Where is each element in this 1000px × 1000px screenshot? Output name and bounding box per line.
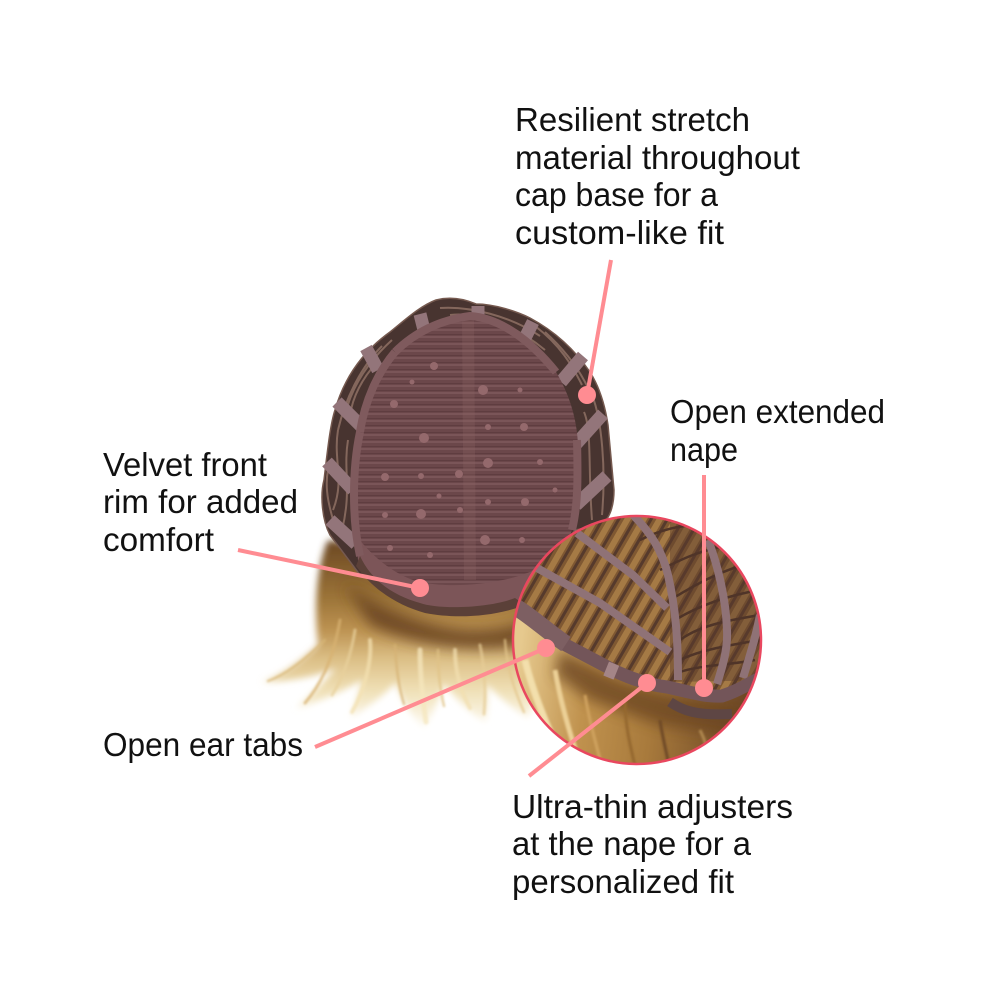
inset hair (514, 618, 748, 763)
label: open ear tabs: Open ear tabs (103, 726, 303, 763)
label: velvet front rim (103, 446, 298, 558)
callout line: velvet rim (238, 550, 429, 597)
mesh dots (381, 362, 558, 558)
cap side panels (322, 298, 614, 590)
label: open extended nape: nape (670, 431, 738, 468)
inset slider (603, 662, 619, 680)
label: resilient stretch material: material throughout (515, 139, 800, 176)
wig cap (322, 298, 614, 616)
label: velvet front rim: comfort (103, 521, 214, 558)
label: resilient stretch material (515, 101, 800, 251)
elastic straps (327, 306, 607, 544)
label: resilient stretch material: custom-like fit (515, 214, 724, 251)
cap side strands (327, 308, 604, 530)
label: open extended nape (670, 393, 885, 468)
label: velvet front rim: rim for added (103, 483, 298, 520)
inset ear tab (514, 606, 566, 644)
label: resilient stretch material: cap base for a (515, 176, 719, 213)
inset cross wefts (640, 525, 760, 672)
callout line: ear tabs (315, 639, 555, 747)
dark hair root shadow (345, 585, 545, 648)
inset open wefting (522, 517, 760, 690)
wig hair (262, 540, 570, 728)
infographic canvas (103, 107, 883, 900)
side rim strips (354, 316, 577, 556)
label: velvet front rim: Velvet front (103, 446, 267, 483)
callout line: adjusters (529, 674, 656, 776)
mesh crown (353, 315, 578, 608)
label: ultra-thin adjusters: at the nape for a (512, 825, 752, 862)
inset hair root shade (548, 648, 734, 734)
inset right side shading (670, 522, 760, 682)
zoomed inset: nape detail (512, 514, 762, 766)
front rim (356, 535, 560, 613)
inset adjuster band (560, 642, 760, 696)
callout line: extended nape (695, 475, 713, 697)
inset elastic straps (537, 515, 760, 684)
inset ring (513, 516, 761, 764)
label: resilient stretch material: Resilient stretch (515, 101, 750, 138)
label: ultra-thin adjusters: Ultra-thin adjusters (512, 788, 793, 825)
vertical centre seam (462, 318, 476, 580)
inset hair strands (525, 660, 712, 770)
label: ultra-thin adjusters (512, 788, 793, 900)
label: open extended nape: Open extended (670, 393, 885, 430)
callout line: stretch material (578, 260, 611, 404)
label: ultra-thin adjusters: personalized fit (512, 863, 734, 900)
inset adjuster flap (670, 702, 732, 714)
